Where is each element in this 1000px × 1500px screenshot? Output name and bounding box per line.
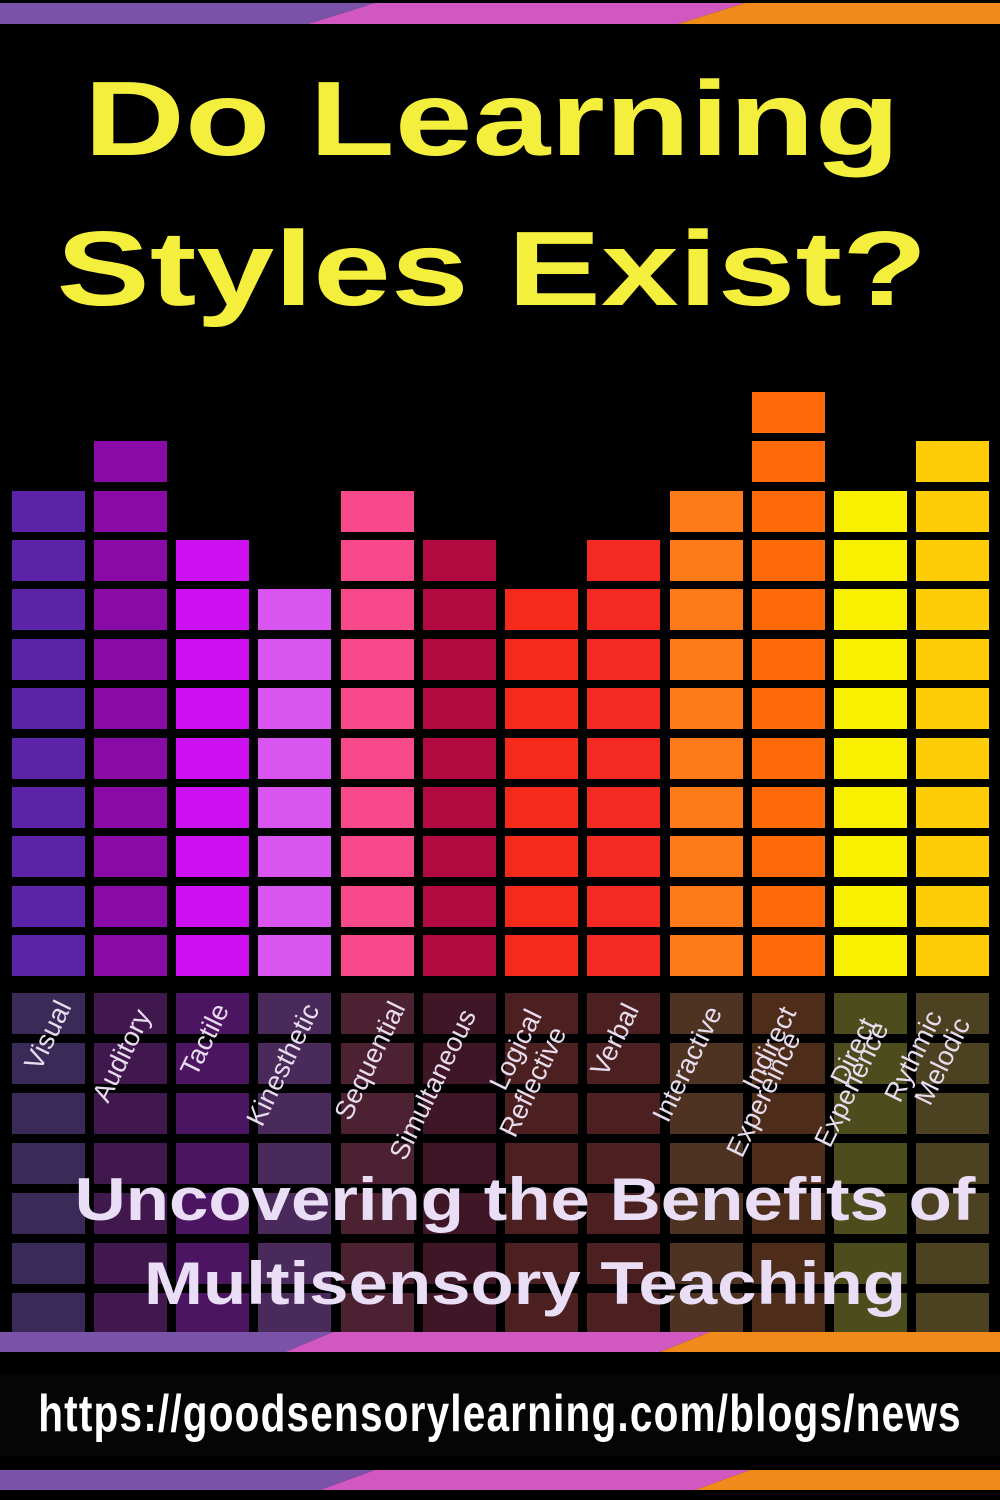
style labels: Experience xyxy=(808,1017,895,1152)
url banner xyxy=(0,1374,1000,1456)
style labels: Auditory xyxy=(86,1004,157,1107)
style labels: Direct xyxy=(824,1013,883,1090)
bottom color stripe xyxy=(0,1470,1000,1490)
url banner: https://goodsensorylearning.com/blogs/news xyxy=(38,1385,962,1443)
subtitle: Multisensory Teaching xyxy=(144,1250,906,1317)
subtitle: Uncovering the Benefits of xyxy=(75,1166,975,1233)
style labels: Verbal xyxy=(584,999,645,1081)
title xyxy=(56,60,928,328)
title: Do Learning xyxy=(84,60,900,178)
style labels: Logical xyxy=(483,1005,548,1095)
top color stripe xyxy=(0,3,1000,24)
style labels: Indirect xyxy=(736,1001,802,1095)
style labels xyxy=(18,996,976,1165)
style labels: Melodic xyxy=(908,1013,976,1110)
title: Styles Exist? xyxy=(56,210,928,328)
style labels: Rythmic xyxy=(878,1006,948,1107)
style labels: Interactive xyxy=(646,1002,728,1127)
subtitle xyxy=(75,1166,976,1317)
style labels: Sequential xyxy=(328,997,411,1125)
style labels: Kinesthetic xyxy=(240,999,325,1131)
middle color stripe xyxy=(0,1332,1000,1352)
style labels: Simultaneous xyxy=(383,1004,482,1165)
style labels: Tactile xyxy=(174,999,235,1081)
style labels: Visual xyxy=(18,996,77,1075)
reflection grid with labels xyxy=(12,993,989,1333)
style labels: Reflective xyxy=(493,1022,572,1142)
style labels: Expereince xyxy=(720,1027,807,1162)
